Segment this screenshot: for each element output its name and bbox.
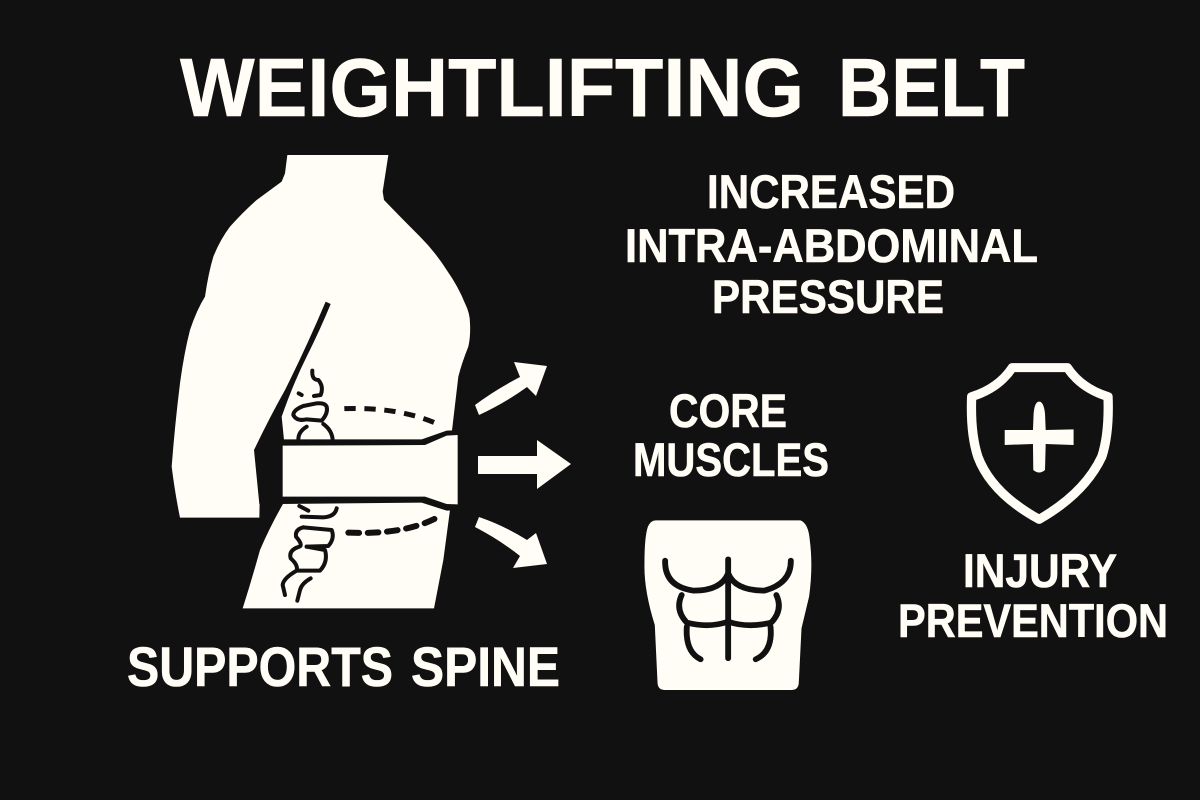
label: supports spine: SUPPORTS — [127, 635, 393, 698]
abs muscle lines — [665, 559, 791, 659]
label: supports spine: SPINE — [411, 635, 560, 698]
belt — [280, 430, 462, 511]
label: increased intra-abdominal pressure: INTRA-ABDOMINAL — [625, 219, 1038, 272]
upper spine vertebrae — [293, 371, 333, 439]
label: increased intra-abdominal pressure: PRESSURE — [712, 270, 944, 323]
icon: shield with plus — [971, 368, 1108, 519]
torso illustration with belt and spine — [172, 155, 470, 608]
label: core muscles: MUSCLES — [633, 433, 829, 486]
icon: abdominal muscles — [644, 520, 811, 690]
label: core muscles — [633, 384, 829, 486]
label: increased intra-abdominal pressure: INCREASED — [707, 165, 955, 218]
gap between arm and torso — [254, 302, 331, 504]
lower spine vertebrae — [283, 506, 337, 601]
arrow: up-right — [475, 362, 547, 415]
upper dashed pressure line — [344, 408, 440, 425]
title: WEIGHTLIFTING — [180, 41, 804, 134]
arrow: right — [478, 440, 571, 489]
label: injury prevention: PREVENTION — [898, 594, 1168, 647]
torso silhouette — [172, 155, 470, 608]
label: increased intra-abdominal pressure — [625, 165, 1038, 323]
lower dashed pressure line — [348, 516, 440, 533]
label: injury prevention: INJURY — [963, 544, 1117, 597]
label: core muscles: CORE — [669, 384, 787, 437]
arrow: down-right — [475, 517, 547, 568]
plus sign — [1005, 402, 1074, 472]
label: injury prevention — [898, 544, 1168, 647]
title: BELT — [838, 41, 1025, 134]
abs torso block — [644, 520, 811, 690]
